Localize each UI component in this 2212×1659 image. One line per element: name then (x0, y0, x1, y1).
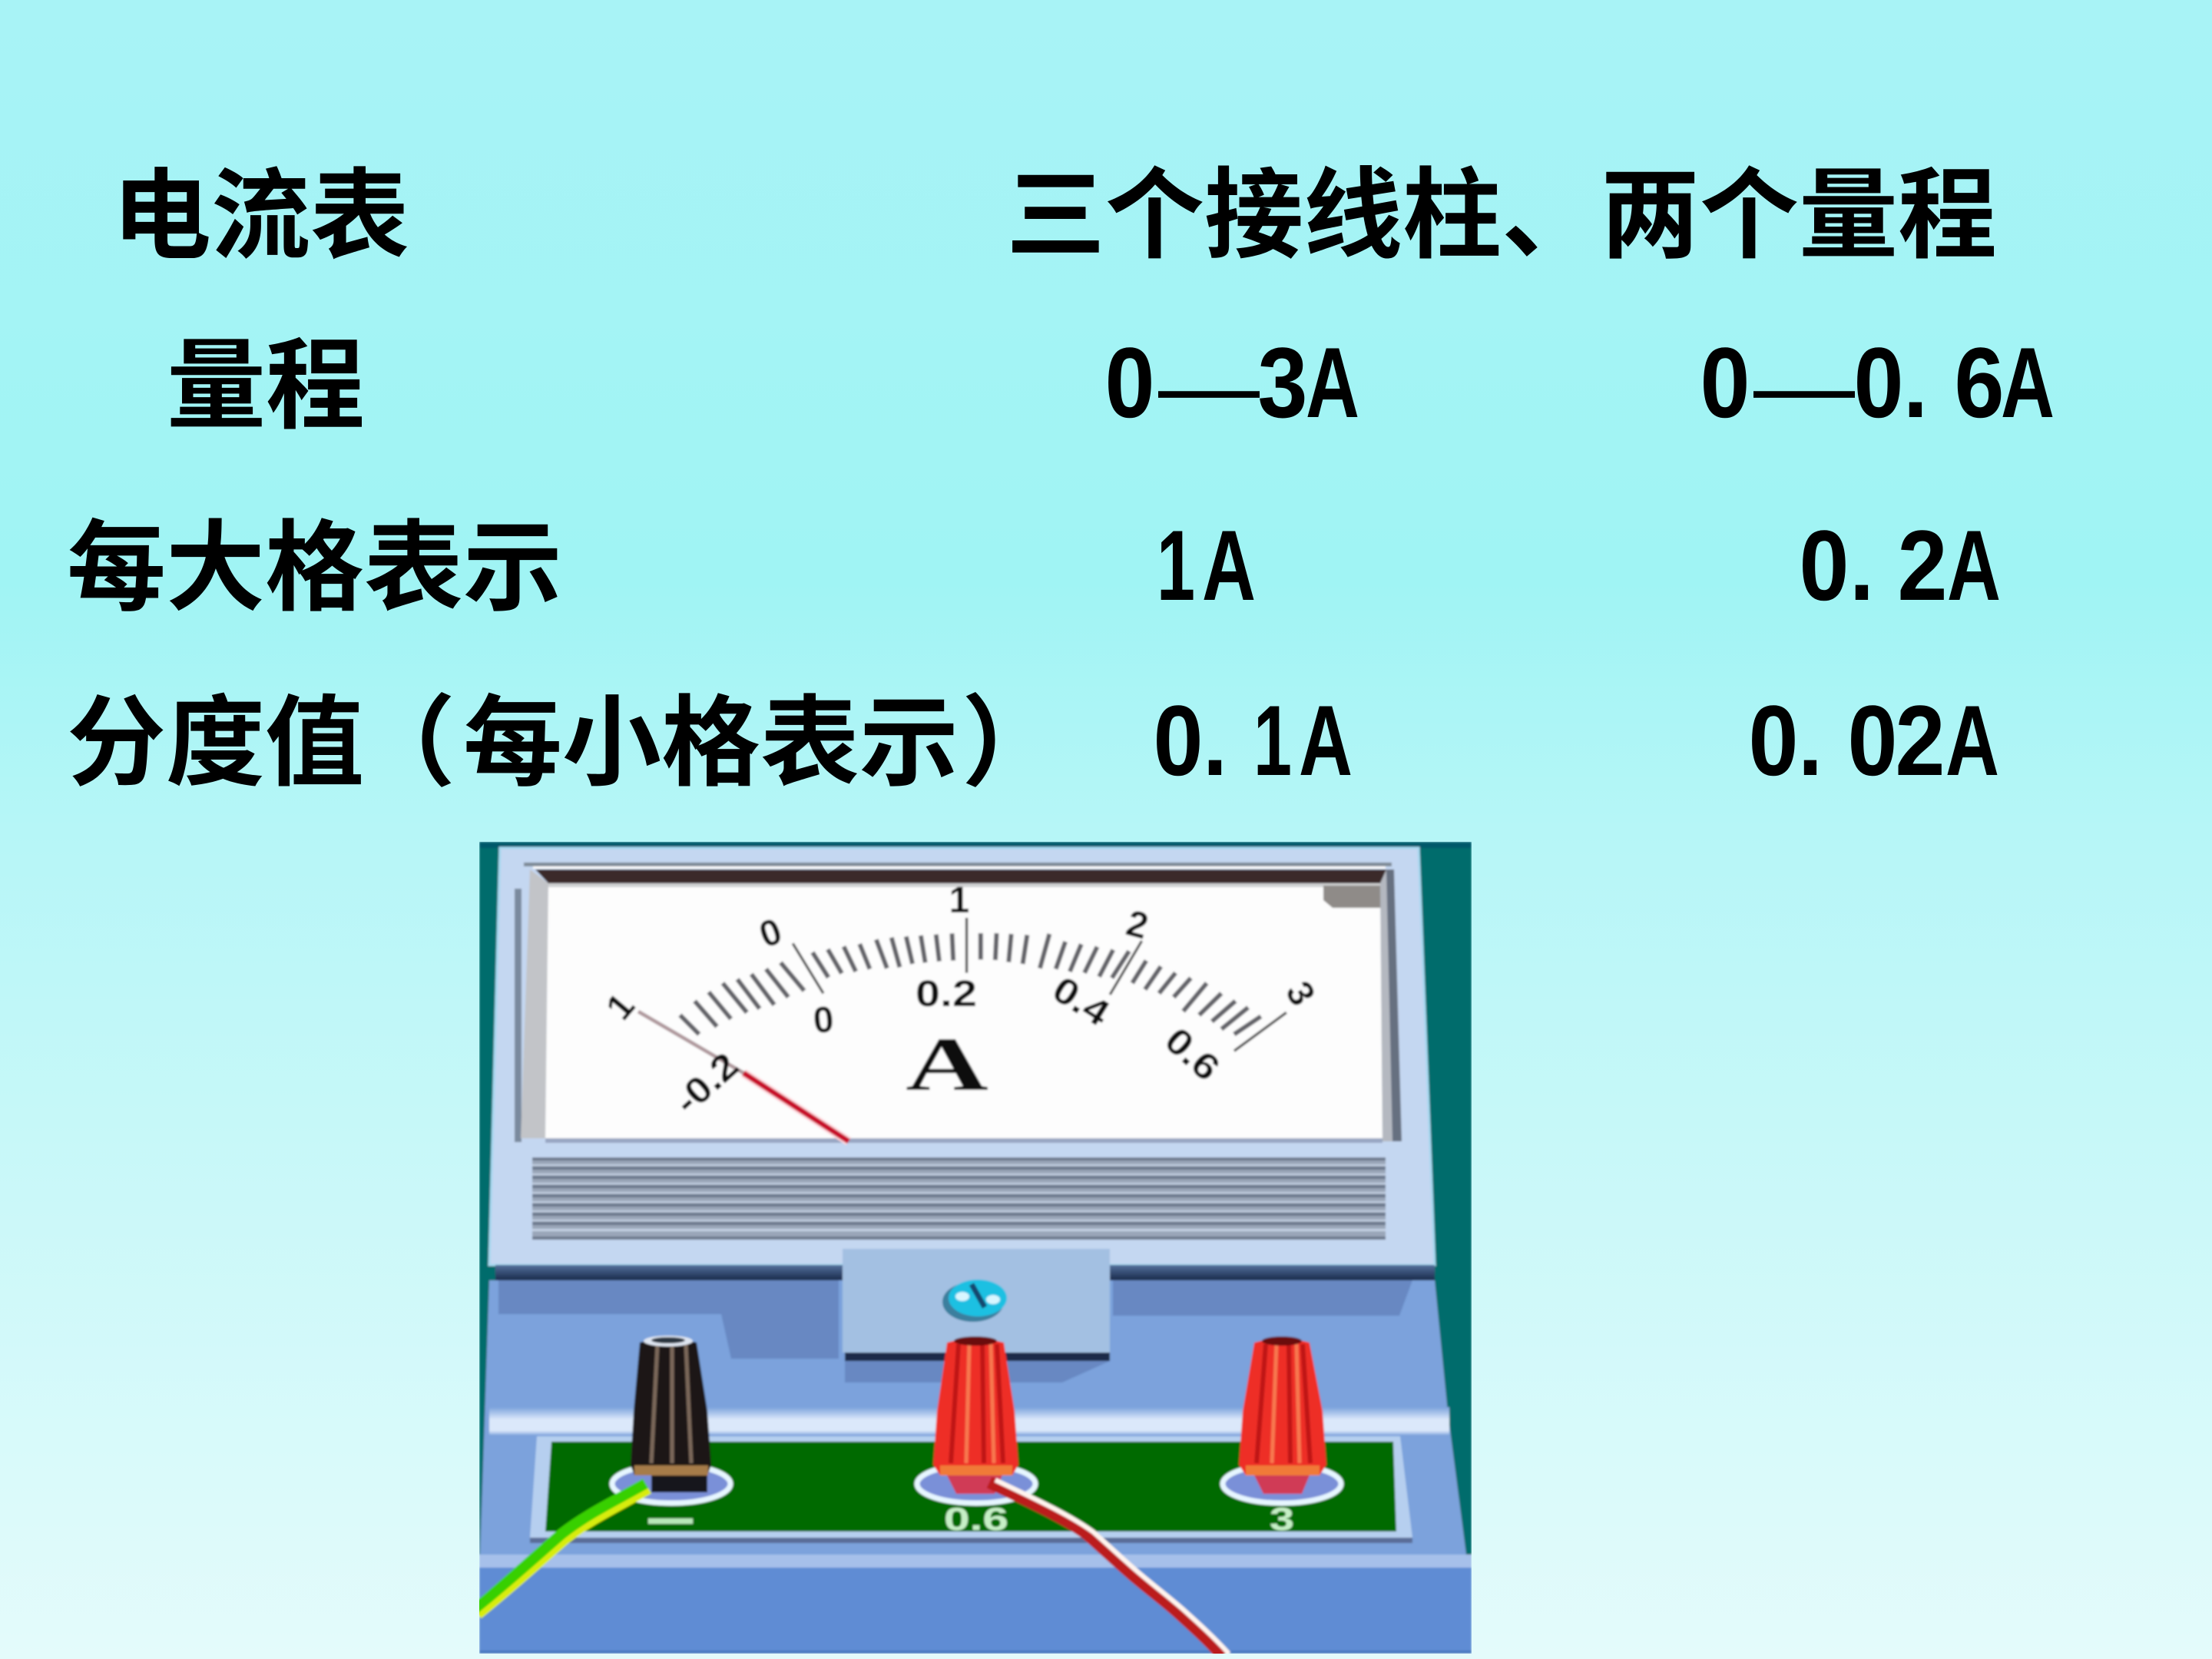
zero adjust screw (942, 1280, 1007, 1322)
red terminal post: 0.6 (933, 1336, 1018, 1494)
red terminal post: 3 (1239, 1336, 1326, 1494)
terminal panel frame (530, 1436, 1412, 1538)
highlight ridge (489, 1407, 1449, 1435)
range value: 0—3A (1104, 326, 1359, 441)
ammeter backdrop (479, 846, 1472, 1556)
dial numbers: upper 0-3 A scale (598, 880, 1323, 1028)
illustration: ammeter (476, 842, 1472, 1656)
row label: 分度值（每小格表示）: 分度值（每小格表示） (67, 688, 1061, 799)
value: 0.02A: 0 (1748, 684, 1799, 796)
dial numbers: lower 0-0.6 A scale (667, 969, 1227, 1123)
meter dial face (545, 883, 1382, 1138)
value: 1A (1157, 509, 1256, 621)
ammeter body (479, 1278, 1468, 1556)
dial numbers: lower 0-0.6 A scale: 0.2 (916, 974, 977, 1015)
dial right wall (1380, 869, 1402, 1141)
dial corner tab (1323, 886, 1382, 908)
zero adjust plate (843, 1249, 1110, 1361)
top shadow band (479, 842, 1472, 848)
value: 0.02A: 2 (1896, 684, 1945, 796)
dial unit letter A: A (906, 1022, 988, 1107)
heading: three terminals, two ranges: 三个接线柱、两个量程 (1006, 161, 1997, 271)
black terminal post (631, 1336, 711, 1492)
value: 0.1A: A (1299, 684, 1353, 796)
range value: 0—3A: 3 (1258, 326, 1307, 439)
dial top shadow (535, 869, 1388, 883)
dial numbers: upper 0-3 A scale: 1 (949, 880, 969, 921)
lower body bottom edge (479, 1651, 1472, 1654)
value: 0.02A: A (1945, 684, 1999, 796)
range value: 0—0.6A: 6 (1954, 326, 2005, 439)
value: 0.1A: 1 (1253, 684, 1292, 796)
terminal panel shadow (530, 1538, 1412, 1543)
range value: 0—3A: A (1306, 326, 1359, 439)
meter window frame (515, 863, 1392, 1142)
louver vents (532, 1157, 1386, 1240)
range value: 0—3A: 0 (1104, 326, 1155, 439)
dial major tick marks (793, 918, 1286, 1051)
value: 0.02A (1748, 684, 1999, 796)
dial numbers: lower 0-0.6 A scale: -0.2 (667, 1045, 747, 1123)
range value: 0—0.6A: A (2001, 326, 2055, 439)
dial needle (638, 1012, 849, 1141)
range value: 0—0.6A: 0 (1854, 326, 1903, 439)
dial numbers: upper 0-3 A scale: 3 (1277, 975, 1323, 1013)
terminal ring: 0.6 (917, 1465, 1035, 1503)
dial numbers: upper 0-3 A scale: 1 (598, 986, 643, 1028)
red wire (989, 1480, 1229, 1656)
value: 0.1A: . (1203, 684, 1227, 796)
upper meter housing (489, 848, 1435, 1265)
dial numbers: lower 0-0.6 A scale: 0.6 (1157, 1020, 1227, 1089)
dial numbers: lower 0-0.6 A scale: 0.4 (1045, 969, 1117, 1035)
range value: 0—0.6A: — (1753, 331, 1855, 441)
value: 0.2A: 0 (1799, 509, 1849, 621)
range value: 0—0.6A: . (1903, 326, 1928, 439)
value: 0.2A: . (1849, 509, 1874, 621)
dial bottom lip (545, 1138, 1382, 1143)
terminal label: minus (648, 1518, 693, 1524)
housing shadow band (495, 1265, 1435, 1280)
range value: 0—0.6A: 0 (1700, 326, 1750, 439)
heading: 电流表: 电流表 (112, 161, 409, 272)
lower step band (479, 1555, 1472, 1568)
terminal ring: 3 (1223, 1465, 1341, 1503)
green terminal panel (545, 1442, 1396, 1532)
value: 1A: A (1202, 509, 1256, 621)
green wire (476, 1485, 650, 1616)
value: 1A: 1 (1157, 509, 1195, 621)
body cast shadows (498, 1280, 1412, 1382)
value: 0.02A: . (1798, 684, 1823, 796)
row label: 每大格表示: 每大格表示 (67, 513, 562, 624)
dial minor tick marks (680, 918, 1286, 1051)
dial numbers: lower 0-0.6 A scale: 0 (812, 999, 836, 1041)
range value: 0—0.6A (1700, 326, 2055, 441)
value: 0.02A: 0 (1848, 684, 1897, 796)
value: 0.2A: 2 (1897, 509, 1948, 621)
terminal label: 3: 3 (1270, 1501, 1294, 1537)
dial numbers: upper 0-3 A scale: 0 (754, 911, 787, 956)
value: 0.2A (1799, 509, 2001, 621)
dial numbers: upper 0-3 A scale: 2 (1122, 902, 1152, 948)
dial top shade (548, 883, 1381, 887)
row label: 量程: 量程 (167, 331, 365, 442)
lower body front (479, 1568, 1472, 1651)
terminal ring: negative (612, 1465, 730, 1503)
terminal label: 0.6: 0.6 (944, 1501, 1008, 1537)
value: 0.1A (1154, 684, 1353, 796)
value: 0.1A: 0 (1154, 684, 1203, 796)
range value: 0—3A: — (1158, 331, 1260, 441)
value: 0.2A: A (1947, 509, 2001, 621)
